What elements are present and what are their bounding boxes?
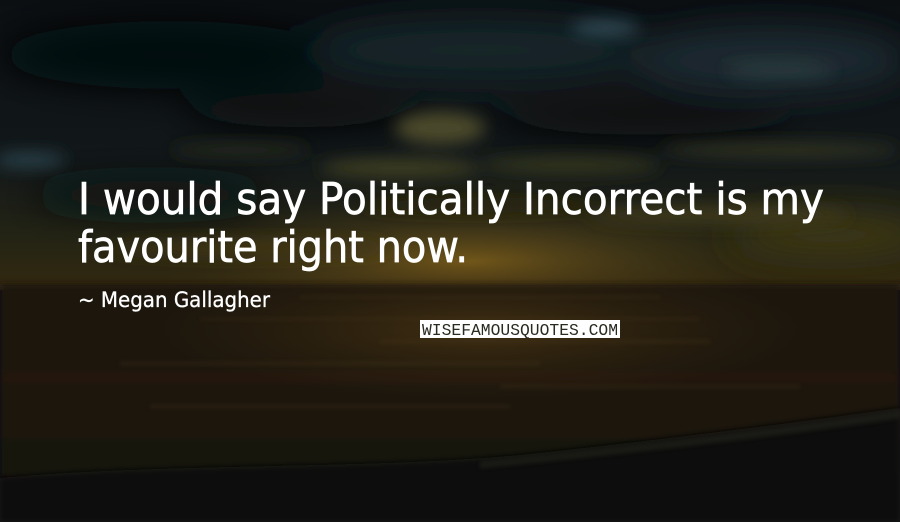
background: sea and beach	[0, 260, 900, 522]
background: evening sky	[0, 0, 900, 332]
quote text: favourite right now.	[78, 222, 468, 273]
attribution: ~ Megan Gallagher	[78, 288, 270, 313]
quote text	[78, 174, 824, 273]
watermark: wisefamousquotes.com: WISEFAMOUSQUOTES.COM	[422, 322, 618, 341]
quote text: I would say Politically Incorrect is my	[78, 174, 824, 225]
